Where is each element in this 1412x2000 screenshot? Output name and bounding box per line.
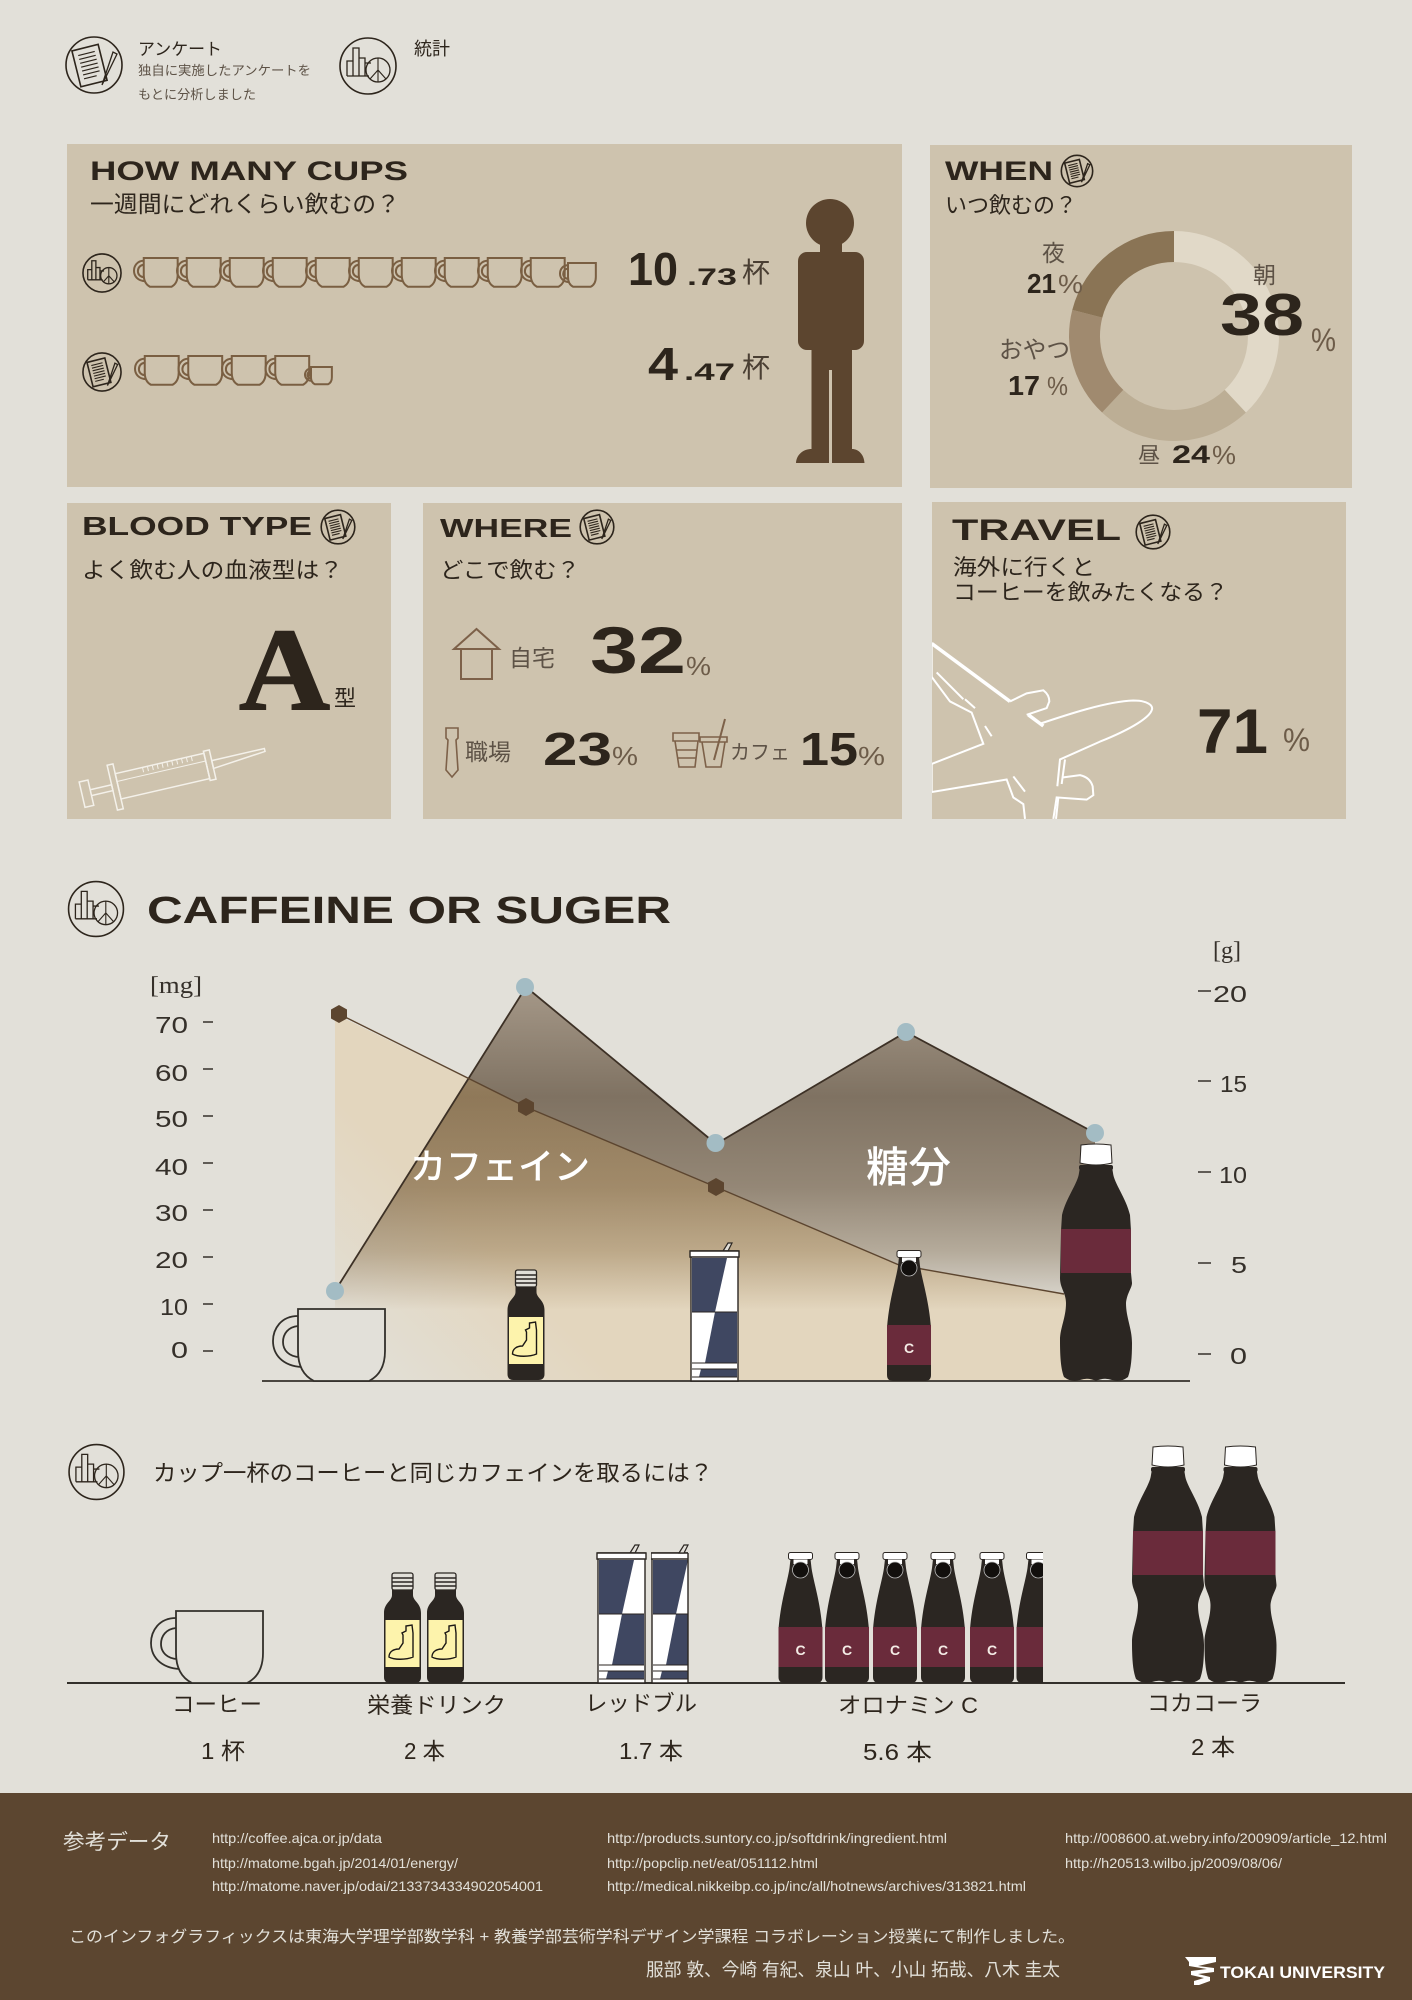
value: A type: A [239,604,330,735]
reference links: http://matome.bgah.jp/2014/01/energy/ [212,1855,458,1871]
right axis: g: 5 [1231,1252,1247,1278]
subheading: いつ飲むの？ [945,193,1077,218]
value: A type: 型 [334,686,356,711]
item: oronamin c: C [938,1642,948,1658]
subheading: どこで飲む？ [440,558,580,583]
icon: person silhouette [796,199,864,463]
left axis: mg: 60 [155,1060,188,1086]
heading: when: WHEN [945,156,1053,186]
label: work 23% [465,723,638,775]
item: coffee [151,1611,263,1764]
cups row: statistics [134,258,596,287]
panel: how many cups [67,144,902,487]
caffeine area [335,1014,1095,1381]
label: home 32%: 自宅 [509,645,555,671]
reference links: http://products.suntory.co.jp/softdrink/ingredient.html [607,1830,947,1846]
item: oronamin c [778,1552,1060,1765]
item: oronamin c: オロナミン C [838,1693,978,1718]
item: coca cola: コカコーラ [1147,1691,1262,1716]
label: cafe 15%: % [858,741,885,771]
icon: survey small [83,353,121,391]
icon: airplane outline [932,643,1152,819]
label: work 23%: 職場 [465,739,511,765]
label: night 21%: 夜 [1042,240,1065,266]
item: oronamin c: C [842,1642,852,1658]
label: snack 17%: % [1047,371,1068,401]
value: 71%: 71 [1197,697,1268,767]
reference links: http://coffee.ajca.or.jp/data [212,1830,382,1846]
legend text: survey: アンケート [138,40,222,59]
baseline [262,1380,1190,1382]
section: caffeine equivalents [67,1445,1345,1765]
left axis: mg: 20 [155,1247,188,1273]
icon: statistics small [83,254,121,292]
label: cafe 15%: カフェ [730,742,790,764]
item: energy drink: 栄養ドリンク [367,1693,506,1718]
value: 71%: % [1283,722,1310,758]
baseline [67,1682,1345,1684]
reference links: http://popclip.net/eat/051112.html [607,1855,818,1871]
legend text: survey: 独自に実施したアンケートを [138,63,311,78]
icon: energy can [690,1243,739,1381]
label: snack 17% [999,337,1070,401]
value: 10.73: 10 [628,243,678,295]
label: noon 24%: % [1212,440,1236,470]
value: 10.73: .73 [687,264,737,291]
icon: survey [321,510,355,544]
subheading: 一週間にどれくらい飲むの？ [90,191,400,217]
left axis: mg: 70 [155,1012,188,1038]
label: morning 38%: 朝 [1253,262,1276,288]
reference links: http://h20513.wilbo.jp/2009/08/06/ [1065,1855,1282,1871]
legend text: survey: もとに分析しました [138,87,256,102]
label: noon 24%: 昼 [1138,443,1160,468]
legend [66,37,450,102]
title: CAFFEINE OR SUGER [147,890,671,932]
caffeine markers [331,1005,724,1196]
credit note: このインフォグラフィックスは東海大学理学部数学科 + 教養学部芸術学科デザイン学課程 コラボレーション授業にて制作しました。 [69,1927,1075,1946]
item: oronamin c: C [795,1642,806,1658]
label: noon 24%: 24 [1172,441,1210,469]
donut chart [1069,231,1279,441]
heading: where: WHERE [440,513,572,543]
icon: statistics [69,1445,124,1499]
left axis: mg: [mg] [150,973,202,999]
subheading: コーヒーを飲みたくなる？ [953,580,1228,605]
icon: cola bottle [1060,1144,1132,1381]
footer [0,1793,1412,2000]
label: night 21%: 21 [1027,268,1056,299]
subheading: 海外に行くと [953,555,1095,580]
value: 4.47 [648,338,770,390]
label: sugar: 糖分 [866,1144,951,1191]
panel: blood type [67,503,391,819]
icon: survey [1136,515,1170,549]
item: red bull [585,1545,700,1764]
icon: vitamin drink [887,1250,931,1381]
right axis: g: 15 [1220,1071,1247,1097]
item: coffee: コーヒー [172,1692,262,1717]
sugar markers [326,978,1104,1300]
left axis: mg: 10 [160,1294,188,1320]
label: work 23%: % [612,741,638,771]
legend text: statistics: 統計 [414,39,450,59]
item: energy drink [367,1573,506,1764]
value: 4.47: 4 [648,338,678,390]
sugar area [335,987,1095,1381]
icon: survey [580,510,614,544]
item: red bull: 1.7 本 [619,1738,683,1764]
icon: tie [446,728,458,777]
value: 4.47: 杯 [742,352,770,383]
value: 4.47: .47 [684,359,735,386]
label: snack 17%: 17 [1008,370,1040,401]
left axis: mg: 0 [171,1337,188,1363]
icon: cafe cups [673,719,727,767]
label: noon 24% [1138,440,1236,470]
icon: house [454,629,499,679]
left axis: mg: 50 [155,1106,188,1132]
icon: energy drink [508,1270,544,1380]
left axis: mg [150,973,213,1363]
item: oronamin c: C [987,1642,997,1658]
chart: caffeine and sugar [150,938,1247,1381]
panel: when [930,145,1352,488]
value: 10.73: 杯 [742,257,770,288]
right axis: g: 20 [1213,981,1247,1007]
heading: travel: TRAVEL [952,514,1121,547]
label: home 32%: % [686,651,711,681]
right axis: g: 0 [1230,1343,1247,1369]
caffeine line [339,1014,1064,1294]
section heading: caffeine or suger [69,882,671,936]
icon: coffee cup [273,1309,385,1381]
panel: where [423,503,902,819]
right axis: g [1198,938,1247,1369]
reference links: http://008600.at.webry.info/200909/article_12.html [1065,1830,1387,1846]
item: energy drink: 2 本 [404,1738,445,1764]
label: night 21% [1027,240,1083,299]
logo: tokai university [1185,1957,1386,1985]
label: morning 38%: % [1311,322,1336,358]
icon: statistics [69,882,123,936]
value: 71% [1197,697,1310,767]
icon: survey [1061,155,1093,187]
icon: syringe [77,730,270,817]
label: night 21%: % [1058,269,1083,299]
left axis: mg: 30 [155,1200,188,1226]
heading: blood type: BLOOD TYPE [82,511,312,541]
label: caffeine: カフェイン [410,1146,590,1187]
reference links: http://medical.nikkeibp.co.jp/inc/all/hotnews/archives/313821.html [607,1878,1026,1894]
icon: survey [66,37,122,93]
heading: カップ一杯のコーヒーと同じカフェインを取るには？ [153,1461,713,1486]
right axis: g: [g] [1213,938,1241,964]
panel: travel [932,502,1346,819]
label: morning 38%: 38 [1220,282,1304,348]
label: work 23%: 23 [543,723,612,775]
reference links: http://matome.naver.jp/odai/2133734334902054001 [212,1878,543,1894]
authors: 服部 敦、今崎 有紀、泉山 叶、小山 拓哉、八木 圭太 [646,1959,1060,1980]
subheading: よく飲む人の血液型は？ [82,558,343,583]
references label: 参考データ [63,1831,171,1854]
subheading [953,555,1228,605]
right axis: g: 10 [1219,1162,1247,1188]
label: home 32%: 32 [590,613,686,687]
label: cafe 15% [730,723,885,775]
logo: tokai university: TOKAI UNIVERSITY [1220,1963,1386,1982]
item: coffee: 1 杯 [201,1738,245,1764]
label: snack 17%: おやつ [999,337,1070,364]
reference links [212,1830,1387,1894]
left axis: mg: 40 [155,1154,188,1180]
cups row: survey [135,356,332,385]
item: red bull: レッドブル [585,1691,697,1716]
icon: vitamin drink: C [904,1340,914,1356]
item: coca cola: 2 本 [1191,1734,1235,1760]
sugar line [335,987,1095,1291]
item: coca cola [1132,1446,1276,1760]
item: oronamin c: 5.6 本 [863,1739,932,1765]
icon: statistics [340,38,396,94]
legend text: survey [138,40,311,102]
label: home 32% [509,613,711,687]
item: oronamin c: C [890,1642,900,1658]
value: 10.73 [628,243,770,295]
label: morning 38% [1220,262,1336,358]
heading: how many cups: HOW MANY CUPS [90,156,408,186]
label: cafe 15%: 15 [800,723,858,775]
